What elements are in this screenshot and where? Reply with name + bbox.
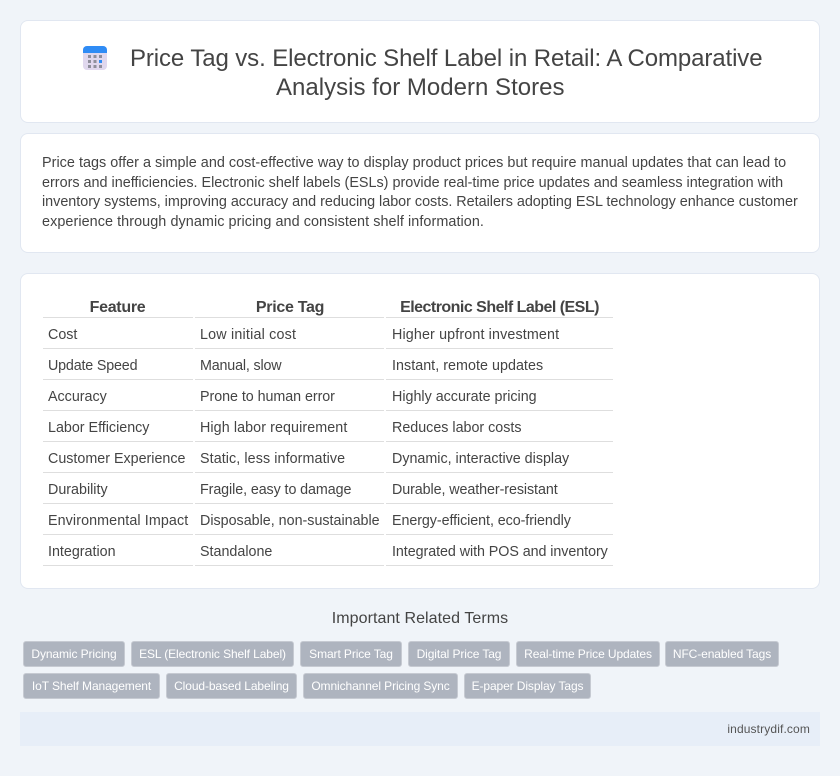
header: Price Tag: Price Tag xyxy=(256,299,324,316)
text block: intro: errors and inefficiencies. Electronic shelf labels (ESLs) provide real-time price updates and seamless integration with xyxy=(42,175,783,191)
row: Labor Efficiency: Reduces labor costs xyxy=(392,420,522,436)
tag: Real-time Price Updates xyxy=(524,647,652,661)
row: Update Speed: Instant, remote updates xyxy=(392,358,543,374)
row: Update Speed: Manual, slow xyxy=(200,358,281,374)
title: Analysis for Modern Stores xyxy=(276,74,565,101)
heading: related terms: Important Related Terms xyxy=(332,610,508,627)
text block: intro: experience through dynamic pricing and consistent shelf information. xyxy=(42,214,484,230)
row: Customer Experience: Dynamic, interactive display xyxy=(392,451,569,467)
tag xyxy=(464,673,591,699)
panel: comparison table xyxy=(20,273,820,589)
row: Durability: Durability xyxy=(48,482,108,498)
row: Cost: Low initial cost xyxy=(200,327,296,343)
row: Customer Experience: Customer Experience xyxy=(48,451,185,467)
tag: Smart Price Tag xyxy=(309,647,393,661)
icon: calendar grid xyxy=(83,46,107,70)
row: Customer Experience xyxy=(48,451,570,467)
text block: intro: inventory systems, improving accuracy and reducing labor costs. Retailers adopting ESL technology enhance customer xyxy=(42,194,798,210)
title: Price Tag vs. Electronic Shelf Label in Retail: A Comparative xyxy=(130,45,762,72)
row: Integration: Integrated with POS and inventory xyxy=(392,544,608,560)
tag: IoT Shelf Management xyxy=(32,679,151,693)
tag: Dynamic Pricing xyxy=(31,647,117,661)
text block: intro: Price tags offer a simple and cost-effective way to display product prices but require manual updates that can lead to xyxy=(42,155,786,171)
tag xyxy=(408,641,510,667)
header: ESL: Electronic Shelf Label (ESL) xyxy=(400,299,599,316)
comparison table xyxy=(43,299,613,566)
row: Update Speed xyxy=(48,358,543,374)
text block: intro xyxy=(42,155,798,230)
panel: header xyxy=(20,20,820,123)
row: Environmental Impact: Energy-efficient, eco-friendly xyxy=(392,513,571,529)
row: Durability xyxy=(48,482,558,498)
title xyxy=(130,45,762,101)
panel: intro paragraph xyxy=(20,133,820,253)
tag: Cloud-based Labeling xyxy=(174,679,289,693)
row: Labor Efficiency: Labor Efficiency xyxy=(48,420,149,436)
tag: Digital Price Tag xyxy=(417,647,501,661)
row: Cost: Higher upfront investment xyxy=(392,327,559,343)
tag xyxy=(166,673,297,699)
row: Cost xyxy=(48,327,559,343)
row: Update Speed: Update Speed xyxy=(48,358,137,374)
row: Environmental Impact: Disposable, non-sustainable xyxy=(200,513,380,529)
tag xyxy=(131,641,294,667)
tag xyxy=(23,641,125,667)
header: Feature: Feature xyxy=(90,299,145,316)
tag xyxy=(23,673,160,699)
row: Integration: Standalone xyxy=(200,544,272,560)
row: Customer Experience: Static, less informative xyxy=(200,451,345,467)
tag xyxy=(303,673,458,699)
row: Accuracy: Prone to human error xyxy=(200,389,335,405)
row: Labor Efficiency: High labor requirement xyxy=(200,420,347,436)
row: Environmental Impact xyxy=(48,513,571,529)
tag xyxy=(300,641,402,667)
tag xyxy=(516,641,660,667)
row: Durability: Durable, weather-resistant xyxy=(392,482,558,498)
row: Integration xyxy=(48,544,608,560)
footer bar xyxy=(20,712,820,746)
row: Accuracy: Highly accurate pricing xyxy=(392,389,537,405)
tag xyxy=(665,641,779,667)
row: Accuracy xyxy=(48,389,537,405)
tag cloud xyxy=(23,641,779,699)
row: Labor Efficiency xyxy=(48,420,522,436)
tag: E-paper Display Tags xyxy=(472,679,583,693)
row: Accuracy: Accuracy xyxy=(48,389,107,405)
row: Integration: Integration xyxy=(48,544,116,560)
footer text: industrydif.com xyxy=(727,722,810,736)
row: Environmental Impact: Environmental Impact xyxy=(48,513,188,529)
tag: Omnichannel Pricing Sync xyxy=(311,679,450,693)
tag: ESL (Electronic Shelf Label) xyxy=(139,647,286,661)
row: Cost: Cost xyxy=(48,327,77,343)
tag: NFC-enabled Tags xyxy=(673,647,771,661)
row: Durability: Fragile, easy to damage xyxy=(200,482,351,498)
